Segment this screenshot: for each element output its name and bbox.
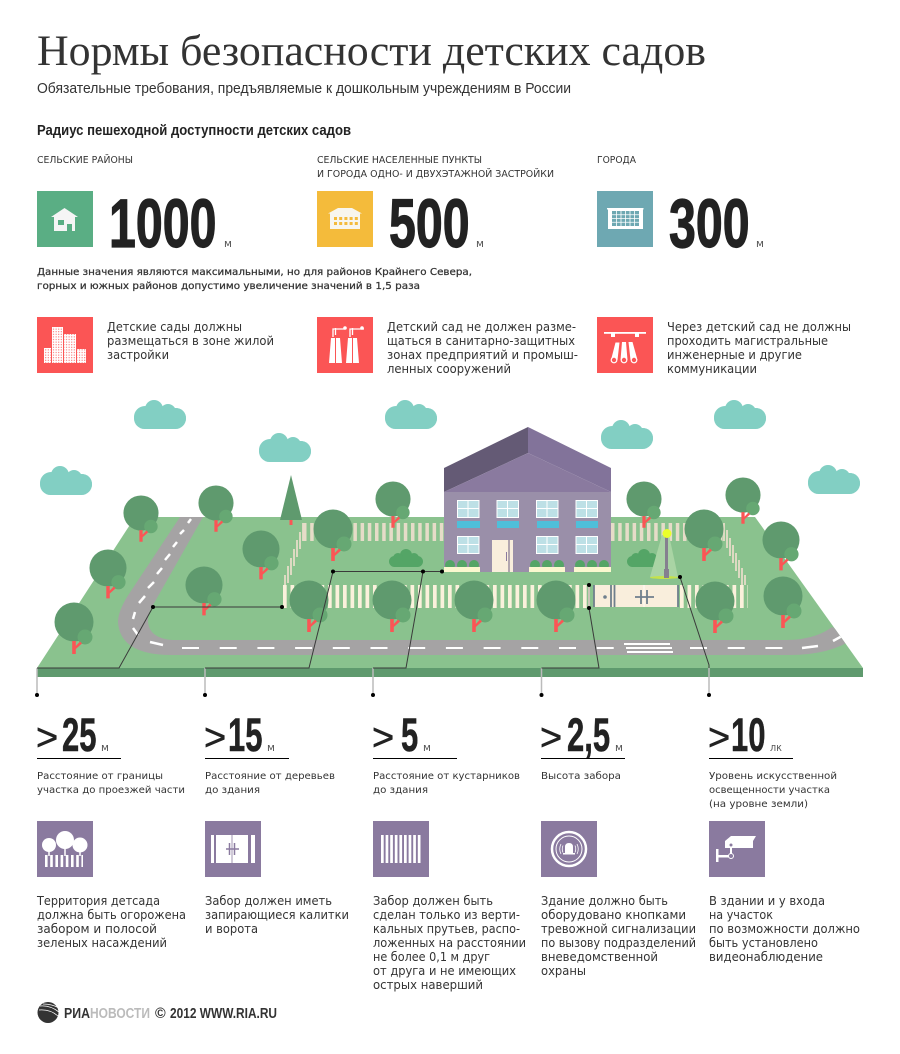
requirement: vertical rods fence: кальных прутьев, распо- <box>373 922 520 936</box>
icon: factory chimneys <box>317 317 373 373</box>
metric: illumination: > <box>708 717 730 759</box>
panel: sanitary zones rule <box>317 317 578 376</box>
clouds <box>40 400 860 495</box>
road <box>118 517 855 655</box>
requirement: video surveillance: на участок <box>709 908 773 922</box>
logo: RIA Novosti: 2012 WWW.RIA.RU <box>170 1006 277 1022</box>
note: maximum values: горных и южных районов допустимо увеличение значений в 1,5 раза <box>37 281 420 292</box>
metric: distance to roadway: > <box>36 717 58 759</box>
front fence and gate <box>283 585 748 608</box>
requirement: vertical rods fence: Забор должен быть <box>373 894 493 908</box>
requirement: fenced territory: Территория детсада <box>36 894 160 908</box>
trees: front row <box>54 576 802 654</box>
icon: trees behind fence <box>37 821 93 877</box>
icon: vertical bars <box>373 821 429 877</box>
metric: distance to shrubs <box>372 710 520 796</box>
requirement: alarm buttons: по вызову подразделений <box>541 936 696 950</box>
requirement: video surveillance: по возможности должно <box>709 922 860 936</box>
icon: apartment block <box>597 191 653 247</box>
logo: RIA Novosti: © <box>155 1006 166 1022</box>
requirement: alarm buttons: вневедомственной <box>541 950 658 964</box>
requirement: fenced territory <box>36 821 186 950</box>
panel: rural districts radius: м <box>224 238 232 250</box>
logo: RIA Novosti: НОВОСТИ <box>90 1006 150 1022</box>
street lamp <box>650 529 678 579</box>
panel: settlements radius: СЕЛЬСКИЕ НАСЕЛЕННЫЕ ПУНКТЫ <box>317 155 482 166</box>
metric: distance to trees: > <box>204 717 226 759</box>
illustration: kindergarten plot <box>35 400 863 697</box>
section heading: walking distance: Радиус пешеходной доступности детских садов <box>37 123 351 139</box>
requirement: vertical rods fence: не более 0,1 м друг <box>373 950 490 964</box>
panel: settlements radius: м <box>476 238 484 250</box>
requirement: vertical rods fence: ложенных на расстоянии <box>373 936 526 950</box>
metric: distance to shrubs: 5 <box>401 710 418 762</box>
icon: pipes <box>597 317 653 373</box>
back fence <box>285 523 745 585</box>
metric: distance to roadway: м <box>101 742 109 754</box>
leader lines <box>37 572 709 695</box>
icon: house <box>37 191 93 247</box>
panel: utilities rule: коммуникации <box>667 362 757 376</box>
panel: cities radius: ГОРОДА <box>597 155 636 166</box>
requirement: vertical rods fence: сделан только из верти- <box>373 908 520 922</box>
title: Нормы безопасности детских садов <box>37 27 706 75</box>
metric: distance to trees <box>204 710 335 796</box>
panel: utilities rule: инженерные и другие <box>667 348 802 362</box>
requirement: alarm buttons: оборудовано кнопками <box>541 908 686 922</box>
metric: distance to shrubs: до здания <box>373 785 428 796</box>
panel: residential zone rule <box>37 317 274 373</box>
requirement: video surveillance: В здании и у входа <box>709 894 825 908</box>
metric: illumination: 10 <box>731 710 765 762</box>
ground <box>37 517 863 677</box>
metric: distance to roadway <box>36 710 185 796</box>
icon: low-rise building <box>317 191 373 247</box>
panel: cities radius: м <box>756 238 764 250</box>
requirement: alarm buttons <box>541 821 696 978</box>
metric: illumination: лк <box>770 742 782 754</box>
trees: back row <box>89 477 800 615</box>
panel: utilities rule <box>597 317 851 376</box>
requirement: vertical rods fence: от друга и не имеющих <box>373 964 516 978</box>
metric: illumination: освещенности участка <box>709 785 830 796</box>
icon: alarm bell <box>541 821 597 877</box>
metric: distance to shrubs: м <box>423 742 431 754</box>
metric: distance to trees: 15 <box>228 710 262 762</box>
metric: distance to trees: м <box>267 742 275 754</box>
leader dots <box>35 570 711 697</box>
logo: RIA Novosti <box>38 1002 277 1023</box>
requirement: video surveillance: видеонаблюдение <box>709 950 823 964</box>
metric: illumination: Уровень искусственной <box>709 771 837 782</box>
panel: sanitary zones rule: щаться в санитарно-защитных <box>387 334 575 348</box>
panel: utilities rule: проходить магистральные <box>667 334 828 348</box>
metric: distance to shrubs: > <box>372 717 394 759</box>
panel: settlements radius <box>317 155 554 262</box>
requirement: vertical rods fence <box>373 821 526 992</box>
metric: distance to trees: Расстояние от деревьев <box>205 771 335 782</box>
metric: illumination <box>708 710 837 810</box>
pine tree <box>280 475 302 525</box>
panel: cities radius <box>597 155 764 262</box>
metric: fence height <box>540 710 625 782</box>
requirement: lockable gates <box>205 821 349 936</box>
metric: fence height: м <box>615 742 623 754</box>
requirement: lockable gates: и ворота <box>205 922 258 936</box>
logo: RIA Novosti: РИА <box>64 1006 90 1022</box>
requirement: alarm buttons: охраны <box>541 964 586 978</box>
icon: city buildings <box>37 317 93 373</box>
panel: sanitary zones rule: ленных сооружений <box>387 362 511 376</box>
note: maximum values: Данные значения являются максимальными, но для районов Крайнего Севера, <box>37 267 472 278</box>
metric: distance to roadway: Расстояние от границы <box>37 771 163 782</box>
requirement: vertical rods fence: острых наверший <box>373 978 483 992</box>
panel: rural districts radius <box>37 153 232 262</box>
panel: residential zone rule: застройки <box>107 348 169 362</box>
panel: settlements radius: 500 <box>389 184 470 262</box>
metric: distance to shrubs: Расстояние от кустарников <box>373 771 520 782</box>
requirement: video surveillance <box>709 821 860 964</box>
note: maximum values <box>37 267 472 292</box>
metric: illumination: (на уровне земли) <box>709 799 808 810</box>
panel: settlements radius: И ГОРОДА ОДНО- И ДВУХЭТАЖНОЙ ЗАСТРОЙКИ <box>317 167 554 180</box>
requirement: alarm buttons: тревожной сигнализации <box>541 922 696 936</box>
requirement: fenced territory: должна быть огорожена <box>37 908 186 922</box>
panel: sanitary zones rule: Детский сад не должен разме- <box>387 320 576 334</box>
panel: sanitary zones rule: зонах предприятий и промыш- <box>387 348 578 362</box>
requirement: lockable gates: Забор должен иметь <box>205 894 332 908</box>
metric: distance to roadway: 25 <box>62 710 96 762</box>
metric: fence height: Высота забора <box>541 771 621 782</box>
requirement: video surveillance: быть установлено <box>709 936 818 950</box>
icon: gate <box>205 821 261 877</box>
metric: fence height: > <box>540 717 562 759</box>
panel: rural districts radius: СЕЛЬСКИЕ РАЙОНЫ <box>37 153 133 166</box>
panel: utilities rule: Через детский сад не должны <box>667 320 851 334</box>
subtitle: Обязательные требования, предъявляемые к дошкольным учреждениям в России <box>37 80 571 97</box>
requirement: fenced territory: забором и полосой <box>37 922 157 936</box>
panel: cities radius: 300 <box>669 184 750 262</box>
metric: distance to trees: до здания <box>205 785 260 796</box>
bushes <box>389 549 661 567</box>
panel: residential zone rule: размещаться в зоне жилой <box>107 334 274 348</box>
requirement: fenced territory: зеленых насаждений <box>37 936 167 950</box>
kindergarten building <box>444 427 611 572</box>
metric: fence height: 2,5 <box>567 710 610 762</box>
panel: rural districts radius: 1000 <box>109 184 216 262</box>
icon: security camera <box>709 821 765 877</box>
metric: distance to roadway: участка до проезжей части <box>37 785 185 796</box>
requirement: lockable gates: запирающиеся калитки <box>205 908 349 922</box>
requirement: alarm buttons: Здание должно быть <box>541 894 668 908</box>
panel: residential zone rule: Детские сады должны <box>107 320 242 334</box>
